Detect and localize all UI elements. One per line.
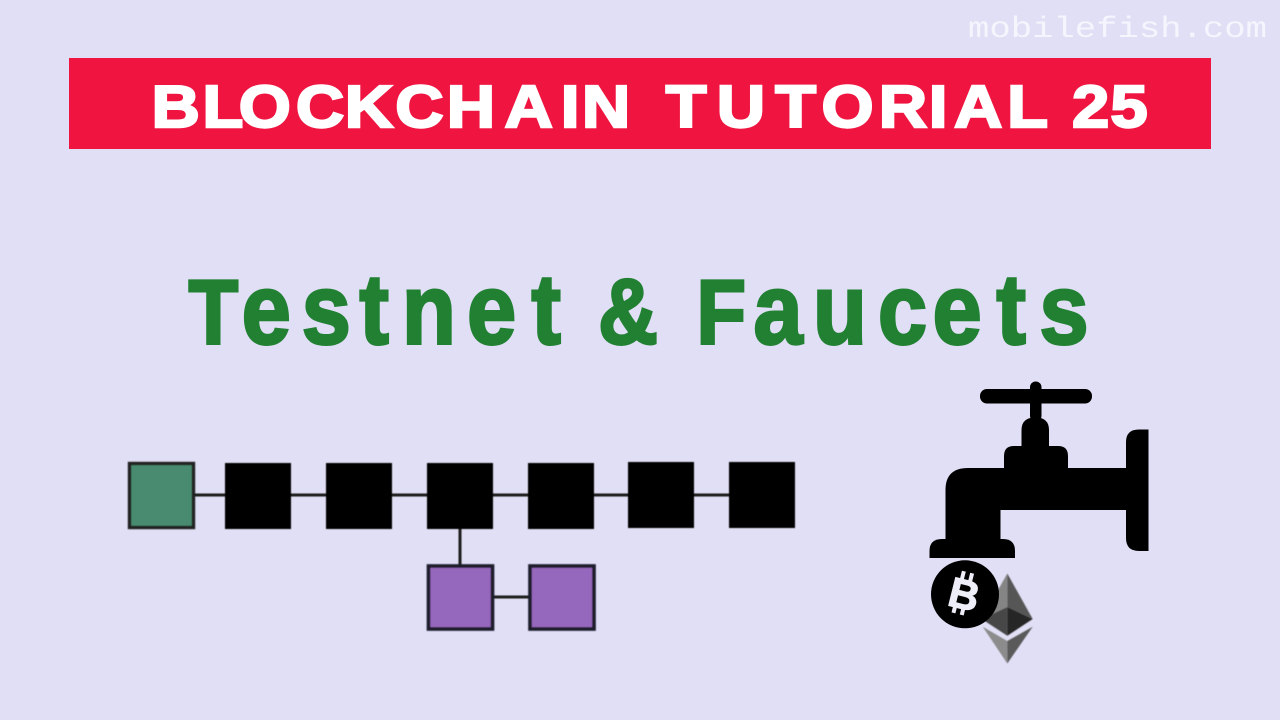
bitcoin B: B (944, 568, 985, 621)
icon: faucet (930, 382, 1148, 558)
heading: Testnet & Faucets: Testnet & Faucets (189, 254, 1089, 365)
title banner (69, 58, 1211, 149)
blockchain diagram (130, 462, 795, 629)
banner heading: BLOCKCHAIN TUTORIAL 25 (152, 75, 1148, 140)
icon: bitcoin (931, 560, 999, 628)
watermark: mobilefish.com: mobilefish.com (968, 13, 1267, 47)
icon: ethereum (982, 574, 1033, 664)
fork blocks (428, 566, 594, 629)
genesis block (130, 464, 194, 528)
main chain blocks (225, 462, 795, 529)
chain connectors (194, 495, 729, 597)
